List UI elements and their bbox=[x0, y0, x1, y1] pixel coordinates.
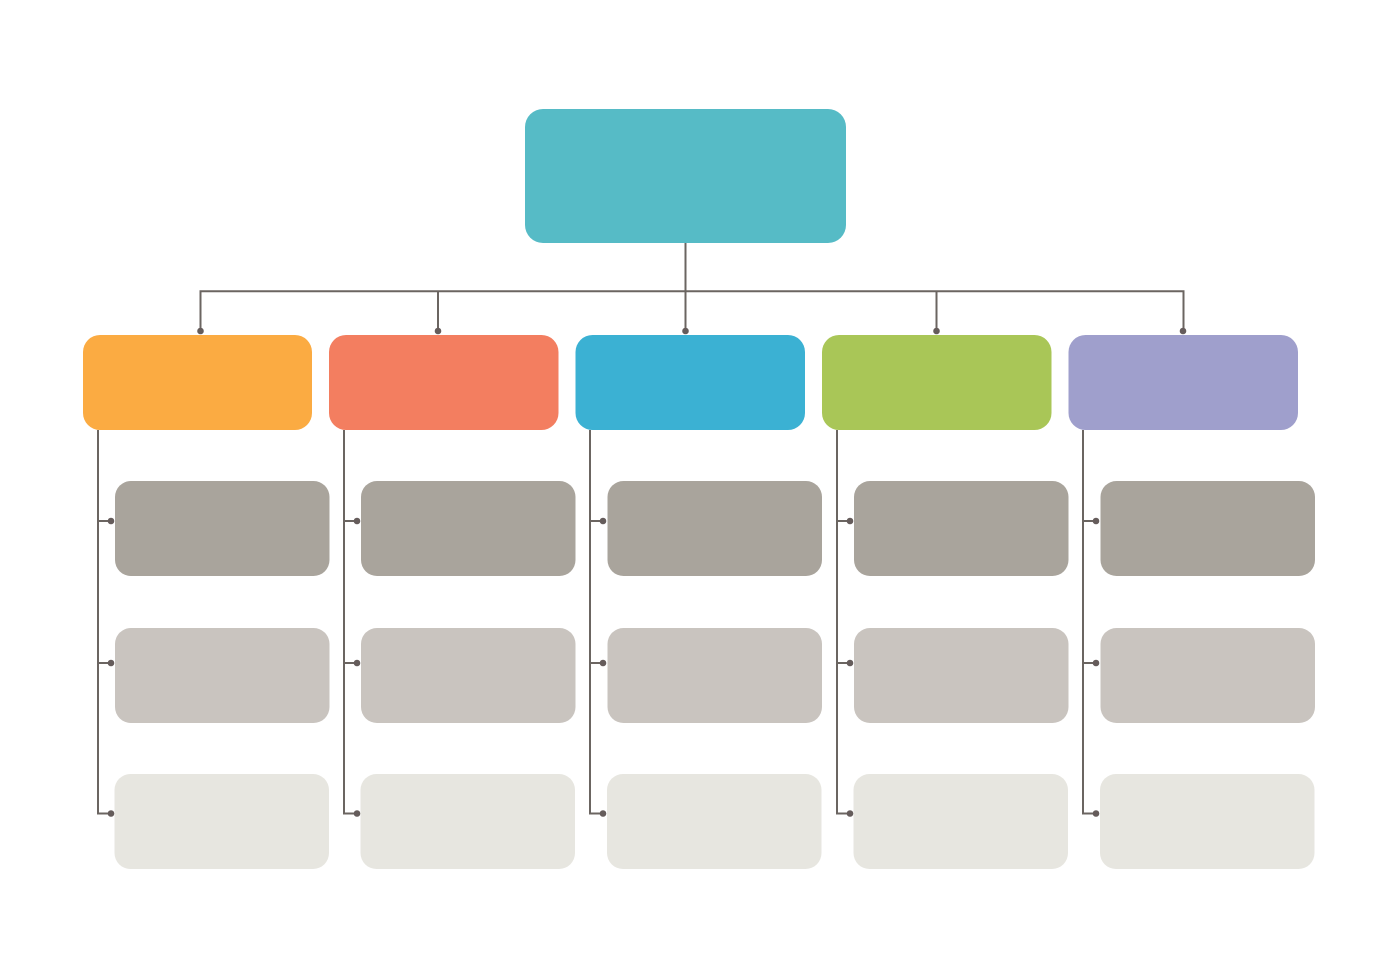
column 3 item 1 bbox=[608, 481, 822, 576]
column 1 item 1 bbox=[115, 481, 330, 576]
column 2 bbox=[329, 335, 576, 869]
top-level connector tree bbox=[197, 243, 1186, 334]
column 2 connectors bbox=[344, 430, 360, 817]
column 3 bbox=[576, 335, 822, 869]
column 1 bbox=[83, 335, 330, 869]
column 1 connectors bbox=[98, 430, 114, 817]
column 3 connectors bbox=[590, 430, 606, 817]
column 5 connectors bbox=[1083, 430, 1099, 817]
column 4 bbox=[822, 335, 1068, 869]
column 4 item 2 bbox=[854, 628, 1068, 723]
column 4 header: green bbox=[822, 335, 1052, 430]
column 1 item 2 bbox=[115, 628, 330, 723]
column 5 item 1 bbox=[1100, 481, 1315, 576]
column 2 header: coral bbox=[329, 335, 558, 430]
column 5 item 2 bbox=[1100, 628, 1315, 723]
column 5 bbox=[1068, 335, 1315, 869]
column 1 item 3 bbox=[114, 774, 329, 869]
root box bbox=[525, 109, 846, 243]
column 4 item 3 bbox=[854, 774, 1068, 869]
column 3 item 2 bbox=[608, 628, 822, 723]
column 2 item 1 bbox=[361, 481, 576, 576]
column 2 item 3 bbox=[360, 774, 575, 869]
column 5 header: lavender bbox=[1068, 335, 1298, 430]
column 3 item 3 bbox=[607, 774, 822, 869]
column 3 header: blue bbox=[576, 335, 805, 430]
column 2 item 2 bbox=[361, 628, 576, 723]
column 1 header: orange bbox=[83, 335, 312, 430]
column 4 connectors bbox=[837, 430, 853, 817]
column 4 item 1 bbox=[854, 481, 1068, 576]
column 5 item 3 bbox=[1100, 774, 1314, 869]
